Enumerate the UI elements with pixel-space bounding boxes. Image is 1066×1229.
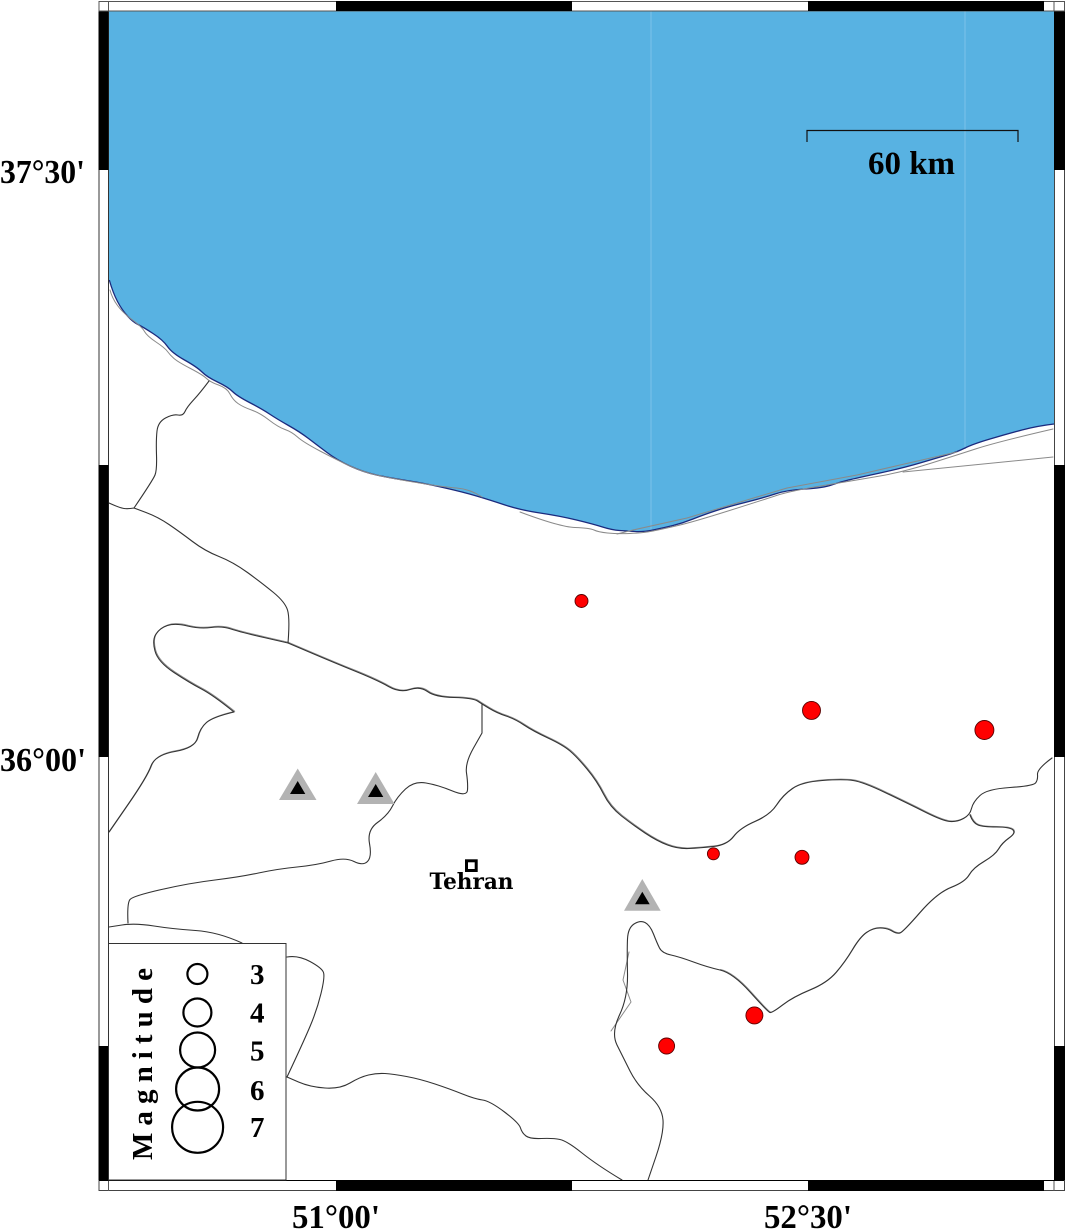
scale bar: 60 km (807, 130, 1018, 182)
station triangle: centre-west (357, 772, 394, 804)
station triangle: east of Tehran (624, 879, 661, 911)
sea: Caspian (108, 11, 1054, 532)
latitude label 37°30': 37°30' (0, 154, 85, 191)
station triangle: west (279, 768, 316, 800)
map frame: right scale ticks (1054, 2, 1065, 1190)
legend numbers: 4 (250, 998, 264, 1030)
legend circles (172, 964, 223, 1153)
map frame: left scale ticks (98, 2, 108, 1180)
province boundaries (109, 381, 1052, 1180)
map frame: top scale ticks (99, 1, 1064, 11)
earthquake epicentres (575, 594, 994, 1054)
legend title: Magnitude (127, 968, 159, 1160)
scale bar: 60 km: 60 km (868, 146, 955, 182)
coastline: grey secondary shoreline (110, 290, 1053, 534)
legend numbers: 6 (250, 1075, 264, 1107)
map frame: bottom scale ticks (99, 1180, 1064, 1191)
legend numbers: 5 (250, 1036, 264, 1068)
legend numbers: 3 (250, 959, 264, 991)
legend numbers (250, 959, 264, 1144)
city marker: Tehran: Tehran (430, 869, 514, 895)
latitude label 36°00': 36°00' (0, 742, 86, 779)
coastline: dark blue shoreline (109, 280, 1054, 532)
legend numbers: 7 (250, 1112, 264, 1144)
legend: magnitude scale (108, 944, 286, 1180)
